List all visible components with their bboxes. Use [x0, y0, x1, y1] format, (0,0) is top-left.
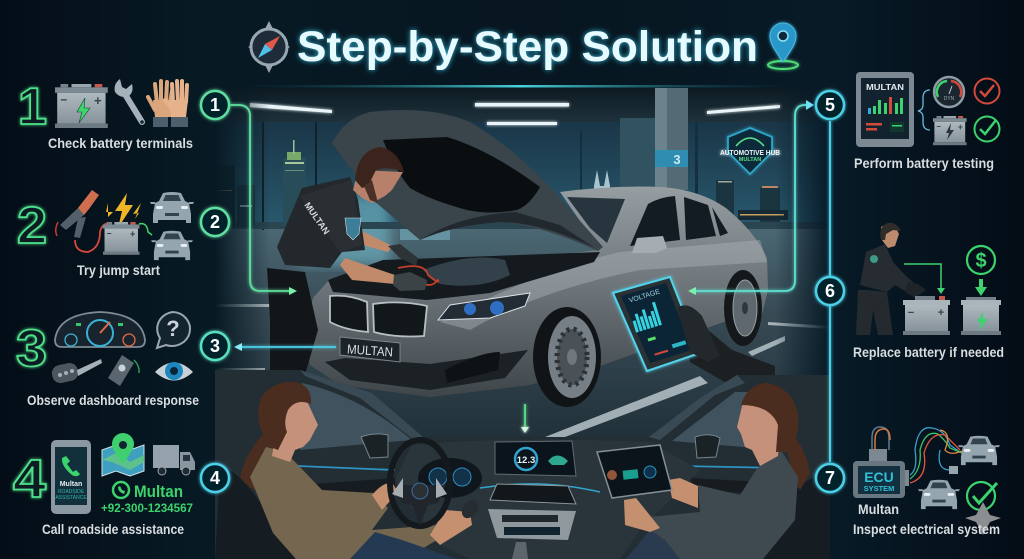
- side mirror: [632, 236, 667, 253]
- key fob: [459, 497, 481, 521]
- right seat: [756, 473, 830, 559]
- marker 1: [201, 91, 229, 119]
- marker 4: 4: [210, 468, 220, 488]
- gear lever: [512, 542, 528, 559]
- panel: step 7: [853, 427, 1001, 537]
- icon: car bottom: [151, 231, 193, 260]
- icon: dollar: [967, 246, 995, 274]
- icon: check: [967, 482, 997, 510]
- diagnostic tablet with glove: [613, 277, 775, 395]
- shoulder badge: [345, 218, 361, 240]
- climate panel: [488, 509, 576, 540]
- numeral 3: 3: [16, 320, 47, 378]
- icon: question bubble: [157, 312, 190, 348]
- icon: car key: [50, 359, 102, 385]
- marker 6: [816, 277, 844, 305]
- ceiling lights: [250, 103, 780, 125]
- passenger-held tablet: [597, 445, 672, 498]
- door ambient strips: [298, 466, 780, 470]
- step markers: [201, 91, 844, 492]
- arm: [340, 258, 395, 284]
- icon: old battery: [903, 296, 950, 335]
- marker 7: 7: [825, 468, 835, 488]
- ponytail: [786, 435, 810, 490]
- icon: gauge: [934, 77, 964, 107]
- driver woman: [240, 382, 481, 559]
- phone number: +92-300-1234567: [101, 501, 193, 515]
- panel: step 6: [853, 223, 1004, 360]
- icon: old battery: +: [938, 307, 944, 319]
- jeans: [626, 530, 695, 559]
- icon: new battery: [961, 297, 1001, 335]
- open hood: [332, 110, 603, 251]
- icon: ECU box: ECU: [864, 469, 894, 485]
- instrument cluster: [418, 458, 482, 498]
- tablet bars: [629, 302, 662, 333]
- face: [272, 397, 318, 462]
- left seat: [215, 467, 295, 559]
- icon: tablet tester: [856, 72, 914, 147]
- mirrors: [361, 434, 388, 458]
- marker 1: 1: [210, 95, 220, 115]
- centre screen: 12.3: [517, 455, 535, 466]
- label: Perform battery testing: [854, 155, 994, 171]
- icon: red check: [974, 78, 1000, 104]
- marker 2: [201, 208, 229, 236]
- diagnostic tablet with glove: VOLTAGE: [628, 288, 661, 305]
- icon: plug: [949, 466, 958, 474]
- hair: [741, 383, 798, 452]
- panel: step 4: [13, 433, 195, 537]
- label: Inspect electrical system: [853, 521, 1000, 537]
- icon: green check: [974, 116, 1000, 142]
- licence plate: [340, 337, 400, 362]
- technician working under hood: [267, 147, 427, 385]
- left side window: [300, 383, 412, 450]
- shirt: [277, 177, 365, 268]
- floor parking lines: [215, 304, 830, 437]
- arrow heads, left: [234, 287, 297, 351]
- dashboard: [395, 440, 700, 559]
- legs: [267, 268, 318, 385]
- phone contact text: Multan: [134, 482, 183, 501]
- shirt text: MULTAN: [302, 200, 332, 236]
- icon: truck: [153, 445, 195, 475]
- ponytail: [240, 435, 274, 490]
- lower bumper: [325, 350, 528, 390]
- marker 5: 5: [825, 95, 835, 115]
- concrete pillar with bay number: [655, 88, 688, 190]
- marker 5: [816, 91, 844, 119]
- icon: phone: [51, 440, 91, 514]
- icon: battery: [55, 84, 108, 128]
- interior frame: [215, 370, 830, 559]
- icon: bare hands: [148, 81, 188, 127]
- icon: phone: Multan: [60, 481, 82, 488]
- icon: ECU box: SYSTEM: [864, 484, 894, 493]
- passenger woman: [624, 383, 810, 559]
- label: Check battery terminals: [48, 135, 193, 151]
- arrow: down into cabin: [521, 404, 529, 433]
- icon: map with pin: [102, 433, 144, 476]
- icon: old battery: −: [908, 307, 914, 319]
- right side window: [672, 392, 780, 450]
- label: Call roadside assistance: [42, 521, 184, 537]
- marker 3: [201, 332, 229, 360]
- icon: gauge: DYN: [944, 96, 955, 102]
- icon: phone: ASSISTANCE: [55, 495, 87, 501]
- gloves: [388, 244, 418, 266]
- icon: battery: [103, 222, 139, 255]
- icon: question bubble: ?: [166, 316, 180, 341]
- label: Replace battery if needed: [853, 344, 1004, 360]
- panel: step 3: [16, 312, 199, 408]
- icon: sparks: [106, 193, 141, 228]
- numeral 1: 1: [18, 78, 47, 136]
- icon: phone: ROADSIDE: [58, 489, 85, 495]
- icon: eye: [155, 362, 193, 380]
- icon: lightning: [77, 98, 90, 123]
- jacket: [250, 447, 442, 559]
- face: [737, 398, 782, 466]
- air vents: [490, 484, 576, 504]
- arrow heads, right: [688, 100, 814, 295]
- wiring: [910, 428, 962, 483]
- front wheel: [533, 307, 601, 407]
- concrete pillar with bay number: 3: [673, 152, 681, 167]
- logo: Automotive Hub Multan shield: AUTOMOTIVE HUB: [720, 148, 781, 157]
- centre screen: [495, 441, 576, 476]
- panel: step 1: [18, 78, 193, 151]
- label: Observe dashboard response: [27, 392, 199, 408]
- car with open hood: [304, 110, 768, 407]
- jeans: [350, 532, 457, 559]
- marker 3: 3: [210, 336, 220, 356]
- grille: [330, 296, 427, 336]
- windows: [567, 196, 728, 246]
- jacket: [649, 447, 798, 559]
- hands: [372, 483, 472, 545]
- title: [248, 21, 798, 73]
- brace: [918, 90, 930, 130]
- grey diamond artefact: [965, 502, 1001, 535]
- steering wheel: [390, 440, 450, 526]
- car interior, dashboard view: [215, 370, 830, 559]
- panel: step 2: [17, 190, 194, 278]
- Multan caption: Multan: [858, 501, 899, 517]
- icon: car top: [150, 192, 194, 223]
- icon: dollar: $: [975, 250, 987, 272]
- city skyline: [215, 140, 788, 227]
- technician figure: [856, 223, 926, 335]
- rear wheel: [724, 270, 762, 346]
- icon: down arrow: [975, 279, 987, 296]
- icon: car right: [958, 436, 1000, 465]
- icon: compass: [248, 21, 290, 73]
- marker 6: 6: [825, 281, 835, 301]
- panel: step 5: [854, 72, 1000, 171]
- label: Try jump start: [77, 262, 160, 278]
- icon: key fob: [108, 355, 139, 386]
- icon: dashboard cluster: [55, 312, 145, 347]
- marker 4: [201, 464, 229, 492]
- icon: car lower: [918, 480, 960, 509]
- icon: tablet tester: MULTAN: [866, 83, 904, 92]
- numeral 2: 2: [17, 197, 47, 255]
- marker 7: [816, 464, 844, 492]
- icon: battery: [933, 116, 967, 145]
- left timeline: [215, 105, 336, 462]
- engine bay: [328, 252, 600, 300]
- head: [353, 170, 403, 203]
- right timeline: [692, 105, 830, 462]
- heading text: Step-by-Step Solution: [297, 23, 758, 71]
- marker 2: 2: [210, 212, 220, 232]
- red test cables: [398, 266, 438, 285]
- icon: wrench: [115, 79, 144, 124]
- icon: replacement arrow: [904, 264, 941, 290]
- icon: battery bolt: [946, 123, 954, 140]
- licence plate: MULTAN: [347, 341, 394, 360]
- icon: whatsapp: [113, 482, 129, 498]
- car body: [304, 187, 768, 397]
- logo: Automotive Hub Multan shield: MULTAN: [739, 157, 761, 163]
- icon: jumper clamps: [56, 190, 152, 252]
- logo: Automotive Hub Multan shield: [720, 128, 781, 174]
- icon: ECU box: [853, 427, 909, 498]
- arrow head: [937, 288, 945, 294]
- hands: [624, 478, 698, 532]
- numeral 4: 4: [13, 449, 46, 509]
- icon: location pin: [768, 23, 798, 69]
- headlight: [438, 293, 530, 320]
- hair: [258, 382, 311, 450]
- central garage scene background: [215, 88, 830, 447]
- glowing divider: [235, 85, 805, 88]
